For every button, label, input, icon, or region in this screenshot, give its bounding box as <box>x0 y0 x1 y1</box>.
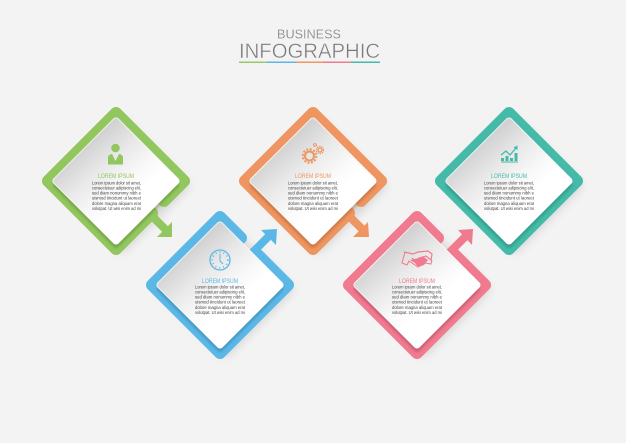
text block: uismod tincidunt ut laoreet <box>392 300 443 305</box>
text block: Lorem ipsum dolor sit amet, <box>195 284 245 289</box>
text block: sed diam nonummy nibh e <box>484 191 534 196</box>
text block: uismod tincidunt ut laoreet <box>484 196 535 201</box>
heading: LOREM IPSUM <box>491 174 527 180</box>
title: BUSINESS <box>277 26 341 42</box>
text block: dolore magna aliquam erat <box>484 201 535 206</box>
heading: LOREM IPSUM <box>399 279 435 285</box>
panel: step 1 green <box>48 113 190 254</box>
arrow: orange <box>343 210 369 237</box>
text block: volutpat. Ut wisi enim ad mi <box>392 310 442 315</box>
text block: sed diam nonummy nibh e <box>195 295 245 300</box>
text block: Lorem ipsum dolor sit amet, <box>484 180 534 185</box>
panel: step 5 teal <box>441 113 583 254</box>
text block <box>195 284 246 315</box>
text block <box>392 284 443 315</box>
panel: step 2 blue <box>152 217 294 358</box>
arrow: green <box>146 210 172 237</box>
text block: volutpat. Ut wisi enim ad mi <box>484 206 534 211</box>
text block: volutpat. Ut wisi enim ad mi <box>288 206 338 211</box>
text block: consectetuer adipiscing elit, <box>288 186 338 190</box>
heading: LOREM IPSUM <box>202 279 238 285</box>
text block: uismod tincidunt ut laoreet <box>195 300 246 305</box>
text block: sed diam nonummy nibh e <box>392 295 442 300</box>
icon: handshake <box>402 251 432 267</box>
text block: Lorem ipsum dolor sit amet, <box>288 180 338 185</box>
text block: sed diam nonummy nibh e <box>92 191 141 196</box>
text block: dolore magna aliquam erat <box>288 201 339 206</box>
text block <box>484 180 535 211</box>
title: INFOGRAPHIC <box>239 40 380 63</box>
text block: consectetuer adipiscing elit, <box>92 186 141 190</box>
arrow: pink <box>450 229 473 252</box>
panel: step 3 orange <box>245 113 387 254</box>
text block: Lorem ipsum dolor sit amet, <box>392 284 442 289</box>
text block: uismod tincidunt ut laoreet <box>288 196 339 201</box>
icon: gears <box>303 144 324 163</box>
text block: consectetuer adipiscing elit, <box>195 290 245 294</box>
text block: dolore magna aliquam erat <box>195 305 246 310</box>
text block: sed diam nonummy nibh e <box>288 191 338 196</box>
text block: consectetuer adipiscing elit, <box>392 290 442 294</box>
text block: volutpat. Ut wisi enim ad mi <box>195 310 245 315</box>
heading: LOREM IPSUM <box>98 174 134 180</box>
icon: person <box>108 144 123 164</box>
text block: Lorem ipsum dolor sit amet, <box>92 180 141 185</box>
panel: step 4 pink <box>349 217 491 358</box>
text block <box>288 180 339 211</box>
text block: dolore magna aliquam erat <box>392 305 443 310</box>
heading: LOREM IPSUM <box>295 174 331 180</box>
icon: clock <box>210 250 230 270</box>
icon: growth chart <box>501 146 518 162</box>
title <box>239 26 380 63</box>
text block: consectetuer adipiscing elit, <box>484 186 534 190</box>
text block: volutpat. Ut wisi enim ad mi <box>92 206 141 211</box>
text block: uismod tincidunt ut laoreet <box>92 196 142 201</box>
text block <box>92 180 142 211</box>
text block: dolore magna aliquam erat <box>92 201 142 206</box>
arrow: blue <box>253 229 277 252</box>
